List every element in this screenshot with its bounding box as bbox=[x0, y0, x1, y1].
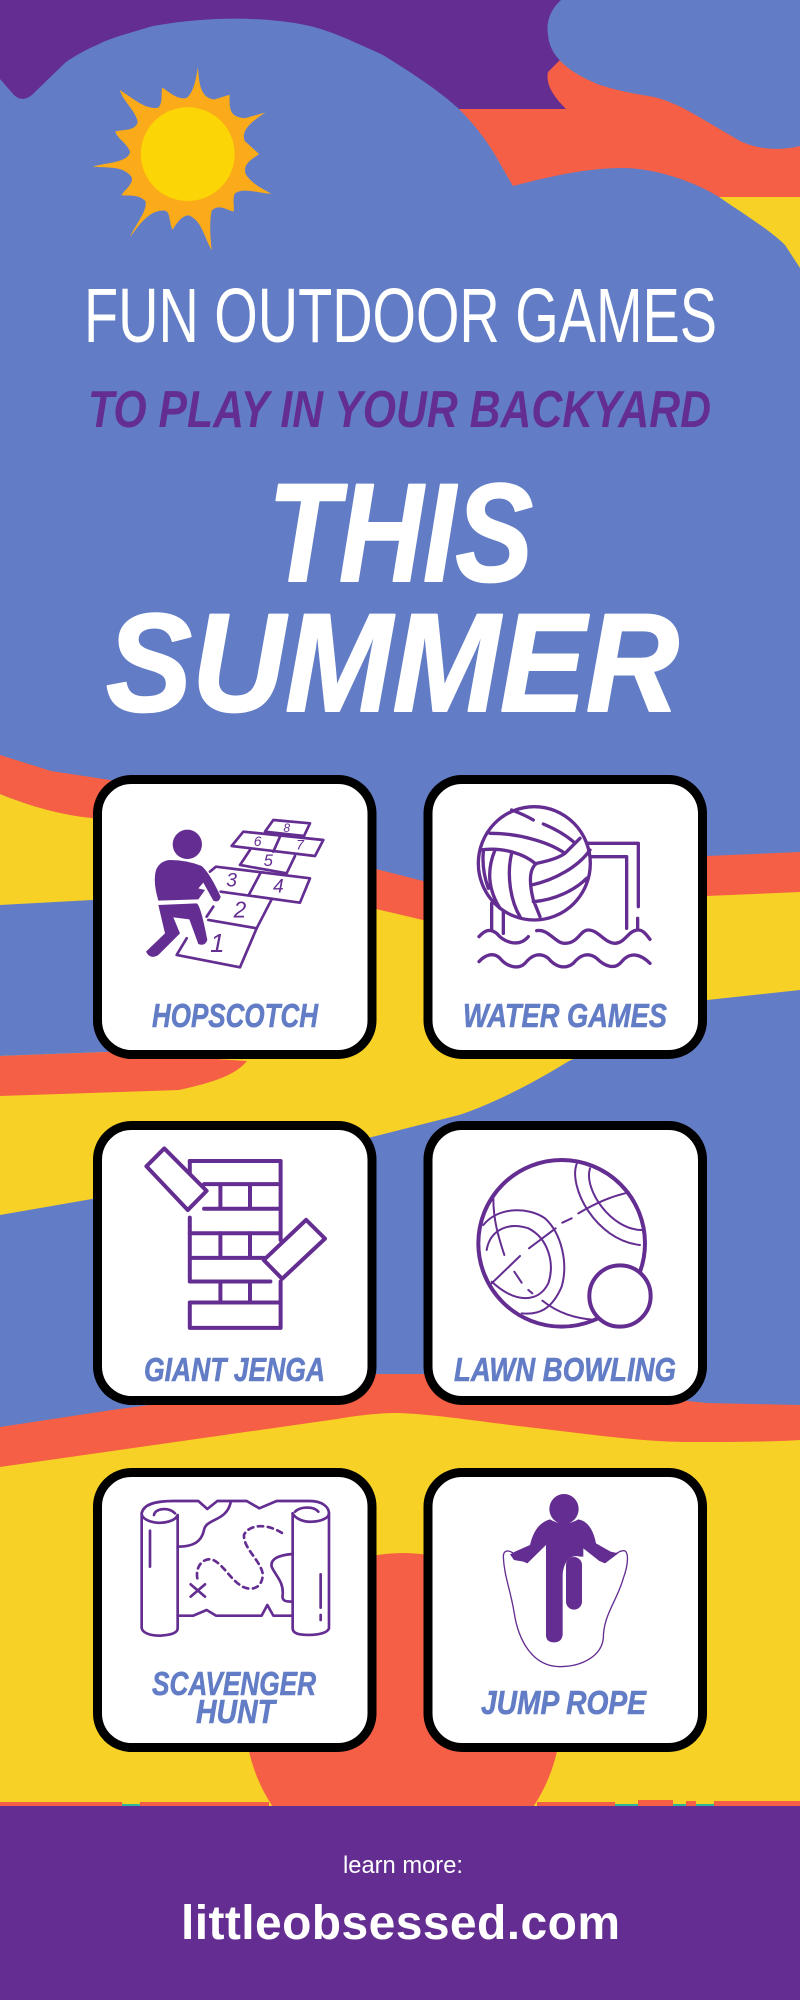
background: orange bottom wave bbox=[0, 1374, 800, 1470]
label: lawn bowling: LAWN BOWLING bbox=[454, 1351, 676, 1388]
heading: summer: SUMMER bbox=[106, 584, 679, 741]
background: blue top right blob bbox=[548, 0, 800, 149]
label: scavenger hunt bbox=[152, 1665, 316, 1730]
icon: hopscotch player and grid: 4 bbox=[273, 877, 284, 898]
icon: hopscotch player and grid: 3 bbox=[226, 871, 237, 892]
background: middle yellow wave bbox=[0, 794, 800, 1215]
icon: hopscotch player and grid: 1 bbox=[210, 928, 225, 958]
background: orange strip above footer bbox=[0, 1800, 800, 1806]
footer: learn more: learn more: bbox=[343, 1852, 463, 1879]
background: teal hairlines above footer bbox=[122, 1804, 714, 1806]
label: hopscotch: HOPSCOTCH bbox=[152, 997, 319, 1034]
heading: this: THIS bbox=[268, 454, 533, 611]
icon: hopscotch player and grid: 6 bbox=[254, 833, 262, 849]
icon: hopscotch player and grid bbox=[146, 820, 323, 967]
icon: hopscotch player and grid: 7 bbox=[296, 836, 305, 852]
footer band bbox=[0, 1806, 800, 2000]
label: scavenger hunt: SCAVENGER bbox=[152, 1665, 316, 1702]
background: orange top right wave bbox=[459, 60, 800, 197]
panel: giant jenga bbox=[98, 1126, 372, 1400]
icon: sun bbox=[93, 67, 271, 250]
background: orange upper wave bbox=[0, 755, 800, 920]
icon: bocce balls bbox=[478, 1160, 651, 1327]
label: scavenger hunt: HUNT bbox=[196, 1693, 277, 1730]
panel: jump rope bbox=[428, 1472, 702, 1748]
background: purple top wave bbox=[0, 0, 570, 109]
background: yellow top right wave bbox=[719, 197, 800, 268]
icon: hopscotch player and grid: 8 bbox=[283, 821, 290, 835]
label: giant jenga: GIANT JENGA bbox=[144, 1351, 325, 1388]
icon: water polo ball and goal bbox=[478, 807, 650, 967]
panel: lawn bowling bbox=[428, 1126, 702, 1400]
panel: water games bbox=[428, 780, 702, 1054]
panel: hopscotch bbox=[98, 780, 372, 1054]
icon: person jumping rope bbox=[503, 1494, 627, 1667]
footer: website: littleobsessed.com bbox=[181, 1897, 620, 1950]
panel: scavenger hunt bbox=[98, 1472, 372, 1748]
icon: hopscotch player and grid: 2 bbox=[233, 896, 247, 922]
icon: treasure map bbox=[142, 1501, 329, 1636]
background: orange half sun bbox=[245, 1553, 561, 1877]
background: orange lower left wave bbox=[0, 1052, 247, 1096]
icon: hopscotch player and grid: 5 bbox=[264, 851, 274, 870]
label: jump rope: JUMP ROPE bbox=[481, 1684, 647, 1721]
background: blue left patch bbox=[0, 900, 200, 1056]
background: yellow bottom area bbox=[0, 1413, 800, 1806]
label: water games: WATER GAMES bbox=[463, 997, 667, 1034]
icon: jenga tower bbox=[146, 1148, 325, 1328]
